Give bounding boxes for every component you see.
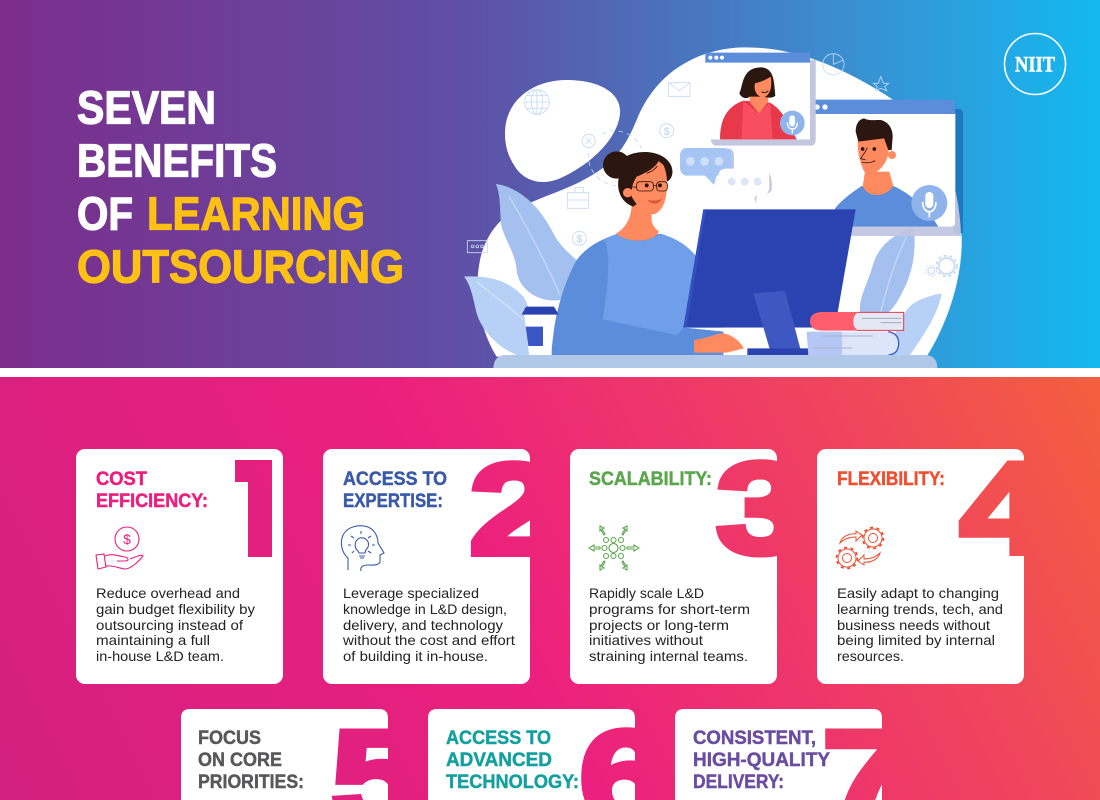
heading: FLEXIBILITY: <box>837 468 945 490</box>
desk <box>493 355 937 368</box>
body text: learning trends, tech, and <box>837 601 1003 617</box>
white background blob <box>477 47 962 357</box>
body text: knowledge in L&D design, <box>343 601 507 617</box>
body text <box>342 585 515 664</box>
body text: being limited by internal <box>837 632 995 648</box>
body text <box>96 585 255 664</box>
woman at desk <box>552 151 723 355</box>
man video window <box>810 100 963 236</box>
title: OF <box>77 187 133 239</box>
body text: business needs without <box>837 617 990 633</box>
monitor <box>683 209 856 355</box>
panel: access to expertise <box>323 449 530 684</box>
woman hand and sleeve <box>660 328 744 355</box>
heading: SCALABILITY: <box>589 468 712 490</box>
body text: initiatives without <box>589 632 703 648</box>
heading: TECHNOLOGY: <box>446 771 579 793</box>
logo: NIIT: NIIT <box>1015 52 1055 76</box>
body text: of building it in-house. <box>343 648 488 664</box>
book stack <box>807 312 904 355</box>
number 1: 1 <box>212 430 290 587</box>
icon: scaling arrows <box>589 526 639 570</box>
heading: ON CORE <box>198 749 282 771</box>
body text: without the cost and effort <box>342 632 515 648</box>
heading <box>343 468 447 512</box>
small white blob <box>505 80 620 182</box>
icon: hand holding coin <box>96 527 143 569</box>
panel: consistent high-quality delivery <box>675 709 882 800</box>
body text: in-house L&D team. <box>96 648 224 664</box>
illustration: video conference worker: $ <box>664 126 670 138</box>
panel: flexibility <box>817 449 1024 684</box>
coffee cup <box>522 307 559 356</box>
illustration: video conference worker <box>464 47 963 368</box>
body text <box>837 585 1003 664</box>
heading: COST <box>96 468 147 490</box>
title: LEARNING <box>147 187 365 239</box>
logo: NIIT <box>1004 34 1066 94</box>
woman video window <box>705 53 816 146</box>
heading <box>446 727 579 793</box>
heading <box>693 727 830 793</box>
body text: programs for short-term <box>589 601 750 617</box>
panel: focus on core priorities <box>181 709 388 800</box>
heading: HIGH-QUALITY <box>693 749 830 771</box>
panel: cost efficiency <box>76 449 283 684</box>
heading: ACCESS TO <box>343 468 447 490</box>
heading: EFFICIENCY: <box>96 490 208 512</box>
body text: Rapidly scale L&D <box>589 585 704 601</box>
panel: access to advanced technology <box>428 709 635 800</box>
header banner background <box>0 0 1100 368</box>
heading <box>198 727 304 793</box>
body text: projects or long-term <box>589 617 729 633</box>
title: BENEFITS <box>77 134 277 186</box>
body text: outsourcing instead of <box>96 617 243 633</box>
number 2: 2 <box>469 436 559 582</box>
heading: DELIVERY: <box>693 771 784 793</box>
left plant leaves <box>496 184 583 301</box>
faint line icons <box>467 54 957 276</box>
icon: head with light bulb <box>341 526 384 571</box>
body text: maintaining a full <box>96 632 210 648</box>
panel: scalability <box>570 449 777 684</box>
icon: gears and arrows <box>836 528 884 568</box>
heading: ACCESS TO <box>446 727 551 749</box>
heading: ADVANCED <box>446 749 552 771</box>
body text: Easily adapt to changing <box>837 585 999 601</box>
heading <box>96 468 208 512</box>
body text <box>589 585 750 664</box>
heading: FOCUS <box>198 727 261 749</box>
body text: resources. <box>837 648 904 664</box>
heading: PRIORITIES: <box>198 771 304 793</box>
number 4: 4 <box>960 435 1050 581</box>
title: SEVEN <box>77 81 216 133</box>
title <box>77 81 404 292</box>
chat bubbles <box>680 148 772 203</box>
body text: delivery, and technology <box>343 617 503 633</box>
right plant leaves <box>860 227 915 317</box>
lower section gradient background <box>0 377 1100 800</box>
number 3: 3 <box>716 435 806 581</box>
heading: CONSISTENT, <box>693 727 816 749</box>
body text: gain budget flexibility by <box>96 601 255 617</box>
body text: Leverage specialized <box>343 585 479 601</box>
illustration: video conference worker: $ <box>576 234 582 246</box>
title: OUTSOURCING <box>77 240 404 292</box>
body text: Reduce overhead and <box>96 585 240 601</box>
body text: straining internal teams. <box>589 648 748 664</box>
panel: cost efficiency: $ <box>123 531 131 547</box>
heading: EXPERTISE: <box>343 490 443 512</box>
